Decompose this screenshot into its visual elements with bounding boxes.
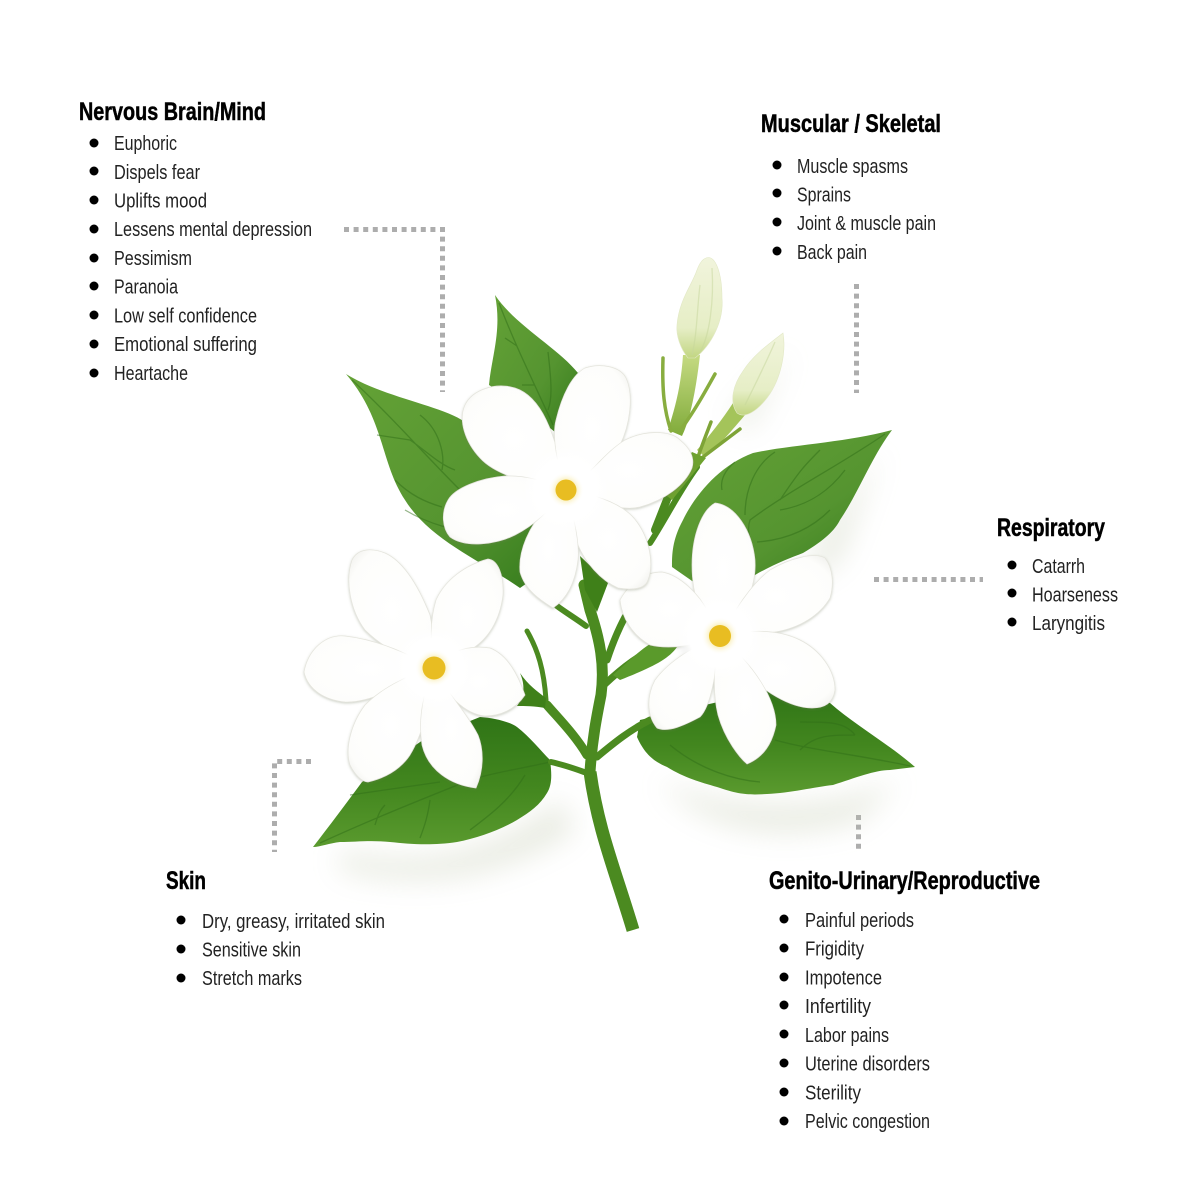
petals xyxy=(443,366,693,608)
bullet list: Laryngitis xyxy=(1032,612,1105,635)
panel: respiratory xyxy=(997,514,1118,635)
heading: Nervous Brain/Mind xyxy=(79,98,266,126)
connector: skin xyxy=(274,762,311,852)
connector: muscular xyxy=(854,284,859,393)
bullet list xyxy=(176,910,385,990)
bullet list: Impotence xyxy=(805,966,882,990)
bullet list: Hoarseness xyxy=(1032,584,1118,606)
stem leaflets xyxy=(517,556,677,708)
bullet list: Pelvic congestion xyxy=(805,1110,930,1133)
panel: muscular / skeletal xyxy=(761,110,941,264)
heading: Genito-Urinary/Reproductive xyxy=(769,867,1040,895)
bullet list: Heartache xyxy=(114,362,188,385)
bullet list xyxy=(90,132,312,385)
bullet list: Painful periods xyxy=(805,909,914,932)
bullet list: Sterility xyxy=(805,1082,862,1104)
bullet list: Dispels fear xyxy=(114,161,200,184)
bullet list: Infertility xyxy=(805,995,872,1018)
bud: upper xyxy=(663,258,722,436)
bullet list: Sensitive skin xyxy=(202,938,301,962)
bullet list: Uplifts mood xyxy=(114,190,207,212)
panel: skin xyxy=(166,867,385,990)
leaf: bottom left xyxy=(313,717,551,847)
leaf: top xyxy=(489,295,578,440)
panel: nervous brain/mind xyxy=(79,98,312,385)
bullet list: Sprains xyxy=(797,184,851,206)
petals xyxy=(620,503,835,764)
panel: genito-urinary/reproductive xyxy=(769,867,1040,1133)
bullet list xyxy=(1008,555,1118,635)
petals xyxy=(304,550,525,788)
bullet list: Muscle spasms xyxy=(797,155,908,178)
bullet list xyxy=(780,909,930,1133)
flower centre xyxy=(392,626,476,710)
leaf: right xyxy=(672,430,892,583)
leaf: left xyxy=(346,374,560,588)
bullet list: Paranoia xyxy=(114,276,178,298)
bullet list: Euphoric xyxy=(114,132,177,155)
flower: right xyxy=(620,503,835,764)
connector: genito-urinary xyxy=(856,815,861,852)
connector: respiratory xyxy=(874,577,983,582)
bullet list: Low self confidence xyxy=(114,304,257,328)
bullet list: Lessens mental depression xyxy=(114,218,312,241)
stems xyxy=(527,467,697,930)
bullet list: Stretch marks xyxy=(202,967,302,990)
bullet list: Pessimism xyxy=(114,247,192,270)
bullet list: Catarrh xyxy=(1032,555,1085,578)
bullet list: Labor pains xyxy=(805,1024,889,1047)
flower centre xyxy=(522,446,610,534)
heading: Skin xyxy=(166,867,206,895)
illustration: jasmine sprig xyxy=(304,258,915,930)
bullet list: Dry, greasy, irritated skin xyxy=(202,910,385,933)
flower centre xyxy=(676,592,764,680)
heading: Respiratory xyxy=(997,514,1105,542)
bullet list: Emotional suffering xyxy=(114,333,257,356)
bud: lower xyxy=(662,333,784,500)
leaf: bottom right xyxy=(637,690,915,794)
bullet list: Frigidity xyxy=(805,938,865,960)
heading: Muscular / Skeletal xyxy=(761,110,941,138)
flower: left xyxy=(304,550,525,788)
bullet list: Joint & muscle pain xyxy=(797,212,936,235)
bullet list xyxy=(772,155,936,264)
soft shadows xyxy=(340,350,900,880)
bullet list: Back pain xyxy=(797,241,867,264)
flower: top xyxy=(443,366,693,608)
bullet list: Uterine disorders xyxy=(805,1052,930,1076)
connector: nervous xyxy=(344,230,442,392)
